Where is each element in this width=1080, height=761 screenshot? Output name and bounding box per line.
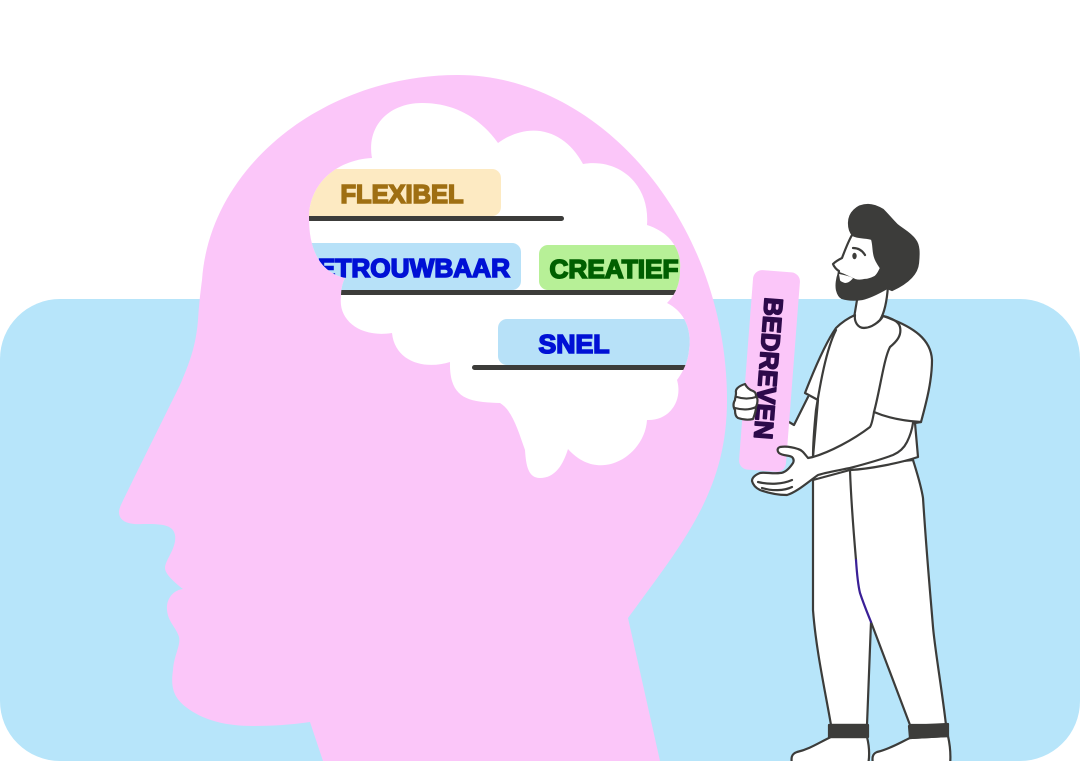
trousers: [813, 460, 946, 725]
label: flexibel: [290, 169, 564, 221]
right cuff: [909, 724, 948, 738]
forearm and lower hand: [753, 448, 814, 494]
card text: BEDREVEN: [748, 297, 789, 440]
label: betrouwbaar: BETROUWBAAR: [299, 253, 510, 283]
right shoe: [872, 736, 950, 761]
left shoe: [792, 737, 869, 761]
clipped labels: [290, 169, 709, 370]
shirt front seam: [813, 330, 836, 457]
brain shape: [309, 103, 690, 478]
label: creatief: [539, 245, 680, 290]
mouth: [839, 274, 853, 283]
fist: [734, 384, 758, 420]
label: snel: [472, 319, 708, 370]
label: flexibel: FLEXIBEL: [340, 179, 464, 209]
man holding card: [734, 205, 950, 761]
face: [832, 234, 854, 276]
left cuff: [829, 725, 868, 737]
eyebrow: [853, 248, 865, 255]
label: snel: SNEL: [538, 329, 610, 359]
shirt body: [805, 315, 932, 480]
sleeve seam: [874, 316, 921, 422]
trouser inseam: [850, 470, 856, 560]
rear arm outline: [789, 397, 808, 425]
finger lines: [758, 480, 792, 490]
label: creatief: CREATIEF: [550, 254, 678, 284]
forearm outline: [752, 412, 913, 495]
rear arm fill: [787, 397, 816, 456]
fist finger lines: [735, 397, 756, 409]
neck: [854, 286, 888, 328]
pink head silhouette: [119, 75, 727, 761]
purple inseam accent: [856, 560, 871, 622]
blue background panel: [0, 299, 1080, 761]
eye: [852, 253, 857, 259]
label: betrouwbaar: [312, 243, 676, 295]
pink card: [738, 269, 801, 473]
brain cloud with skill labels: [290, 103, 709, 478]
hair and beard: [837, 205, 919, 300]
